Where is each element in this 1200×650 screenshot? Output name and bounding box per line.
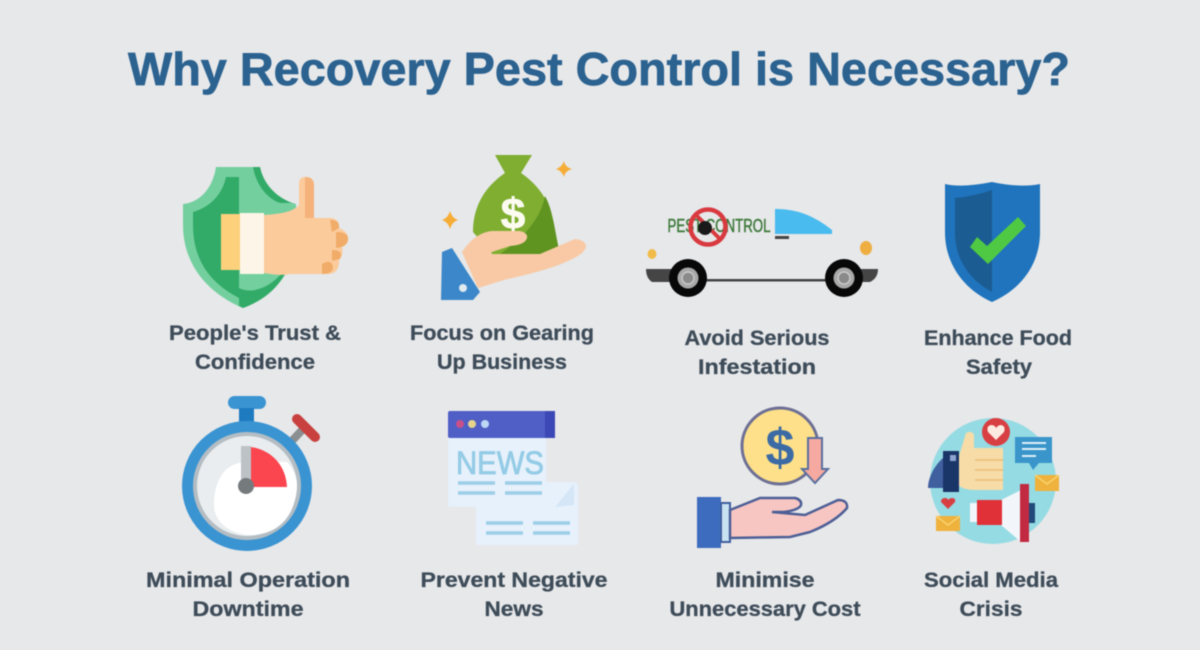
label: focus: Up Business bbox=[437, 351, 567, 374]
title: Why Recovery Pest Control is Necessary? bbox=[128, 43, 1070, 95]
label: focus bbox=[410, 322, 594, 374]
icon: news pages bbox=[448, 411, 578, 545]
label: social media: Social Media bbox=[924, 569, 1058, 592]
icon: news pages: NEWS bbox=[456, 445, 544, 481]
icon: money bag on hand: $ bbox=[501, 190, 525, 239]
label: cost: Minimise bbox=[716, 569, 814, 592]
label: food safety: Enhance Food bbox=[924, 327, 1072, 350]
label: news: Prevent Negative bbox=[420, 569, 608, 592]
label: trust: People's Trust & bbox=[169, 322, 341, 345]
label: food safety: Safety bbox=[966, 356, 1032, 379]
label: cost: Unnecessary Cost bbox=[670, 598, 861, 621]
icon: hand with coin bbox=[697, 408, 847, 548]
label: social media bbox=[924, 569, 1058, 621]
label: food safety bbox=[924, 327, 1072, 379]
label: news: News bbox=[484, 598, 544, 621]
label: social media: Crisis bbox=[960, 598, 1022, 621]
icon: shield with thumbs up bbox=[183, 167, 348, 308]
label: focus: Focus on Gearing bbox=[410, 322, 594, 345]
label: news bbox=[420, 569, 608, 621]
label: trust: Confidence bbox=[195, 351, 315, 374]
icon: social media bbox=[928, 418, 1059, 544]
label: trust bbox=[169, 322, 341, 374]
label: infestation: Avoid Serious bbox=[684, 327, 830, 350]
icon: food safety shield bbox=[945, 182, 1040, 302]
icon: pest control van: PEST CONTROL bbox=[668, 216, 770, 236]
icon: money bag on hand bbox=[441, 155, 586, 300]
icon: pest control van bbox=[646, 209, 878, 297]
label: infestation: Infestation bbox=[698, 356, 816, 379]
label: infestation bbox=[684, 327, 830, 379]
label: downtime: Minimal Operation bbox=[146, 569, 350, 592]
label: downtime bbox=[146, 569, 350, 621]
icon: hand with coin: $ bbox=[766, 419, 795, 477]
label: downtime: Downtime bbox=[192, 598, 304, 621]
icon: stopwatch bbox=[188, 396, 315, 545]
label: cost bbox=[670, 569, 861, 621]
